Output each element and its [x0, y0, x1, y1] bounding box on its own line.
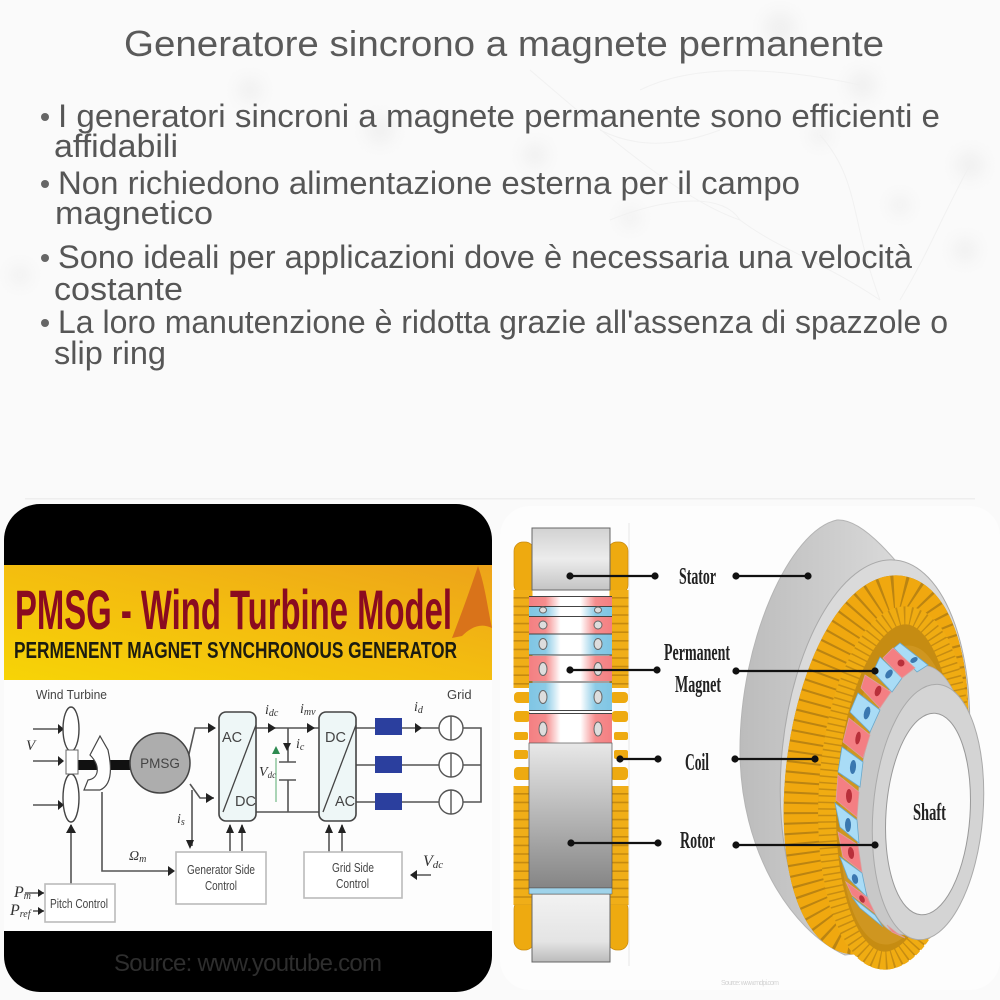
bullet 2: magnetico	[55, 195, 213, 231]
PMSG generator circle	[130, 733, 190, 793]
magnets ring	[835, 643, 928, 927]
component labels: Coil	[685, 750, 709, 776]
generator side control: Control	[205, 878, 237, 893]
diagram labels: Grid	[447, 687, 472, 702]
diagram labels: i	[414, 700, 418, 715]
component labels	[664, 564, 730, 854]
component labels: Stator	[679, 564, 716, 590]
permanent magnets	[529, 596, 612, 743]
3D generator view	[740, 520, 993, 975]
leader lines	[568, 574, 878, 848]
bullet list	[41, 98, 948, 371]
cross-section view	[514, 528, 628, 962]
pitch control	[45, 884, 115, 922]
block diagram	[4, 680, 492, 931]
DC/AC converter	[319, 712, 356, 821]
DC/AC converter: AC	[335, 794, 355, 810]
rotor barrel	[846, 661, 980, 939]
pitch control: Pitch Control	[50, 896, 108, 911]
diagram labels: Wind Turbine	[36, 688, 107, 702]
bullet 1: affidabili	[54, 128, 178, 164]
grid side control: Grid Side	[332, 860, 374, 875]
diagram labels: P	[10, 902, 20, 919]
banner heading: PMSG - Wind Turbine Model	[15, 578, 452, 641]
component labels: Rotor	[680, 828, 715, 854]
magnet holes	[845, 656, 919, 904]
bullet 4: La loro manutenzione è ridotta grazie all'assenza di spazzole o	[58, 304, 948, 340]
diagram labels: d	[418, 705, 424, 716]
diagram labels: m	[24, 891, 31, 902]
diagram labels: V	[259, 765, 268, 780]
image source note: Source: www.mdpi.com	[721, 980, 779, 987]
diagram labels: i	[177, 812, 181, 827]
diagram labels: dc	[433, 859, 443, 871]
diagram labels: s	[181, 817, 185, 828]
bullet 3: costante	[54, 271, 183, 307]
stator back disk	[740, 520, 935, 955]
wind turbine	[63, 707, 133, 822]
source caption: Source: www.youtube.com	[114, 950, 382, 977]
grid side control	[304, 852, 402, 898]
icon: matlab peak logo	[452, 566, 492, 638]
bullet 2: Non richiedono alimentazione esterna per il campo	[58, 165, 800, 201]
bullet 3	[41, 239, 913, 307]
generator side control: Generator Side	[187, 862, 255, 877]
diagram labels: V	[423, 853, 433, 870]
shaft: Shaft	[913, 800, 946, 826]
arrowheads	[38, 723, 422, 915]
diagram labels: Ω	[129, 849, 139, 864]
DC/AC converter: DC	[325, 730, 346, 746]
bullet 4: slip ring	[54, 335, 166, 371]
coil windings	[514, 542, 628, 950]
bullet 1	[41, 98, 940, 164]
stator front ring	[762, 550, 988, 964]
rotor interior	[828, 641, 966, 949]
AC/DC converter: DC	[235, 794, 256, 810]
stator teeth	[783, 585, 969, 945]
grid circles	[439, 716, 463, 814]
bullet 1: I generatori sincroni a magnete permanente sono efficienti e	[58, 98, 940, 134]
filter inductors	[375, 718, 402, 810]
component labels: Magnet	[675, 672, 721, 698]
generator side control	[176, 852, 266, 904]
AC/DC converter: AC	[222, 730, 242, 746]
shaft	[879, 710, 977, 918]
panel: PMSG wind turbine model image	[4, 504, 492, 992]
rotor front face	[863, 680, 993, 944]
banner	[4, 565, 492, 680]
rotor block	[529, 743, 612, 894]
coil ring	[806, 601, 984, 975]
diagram labels: dc	[268, 770, 276, 780]
component labels: Permanent	[664, 640, 730, 666]
diagram labels: i	[265, 703, 269, 718]
diagram labels	[9, 687, 472, 920]
diagram labels: i	[296, 737, 300, 752]
bullet 3: Sono ideali per applicazioni dove è necessaria una velocità	[58, 239, 913, 275]
diagram labels: V	[26, 738, 37, 754]
panel: generator anatomy image	[500, 506, 1000, 990]
diagram labels: i	[300, 702, 304, 717]
diagram labels: c	[300, 742, 305, 753]
PMSG generator circle: PMSG	[140, 756, 180, 771]
diagram labels: mv	[304, 707, 316, 718]
title: Generatore sincrono a magnete permanente	[124, 23, 884, 64]
banner subtitle: PERMENENT MAGNET SYNCHRONOUS GENERATOR	[14, 637, 457, 663]
stator blocks	[532, 528, 610, 962]
bullet 2	[41, 165, 800, 231]
diagram labels: m	[139, 854, 146, 865]
grid side control: Control	[336, 876, 369, 891]
diagram labels: P	[14, 884, 24, 901]
AC/DC converter	[219, 712, 256, 821]
diagram labels: ref	[20, 909, 32, 920]
bullet 4	[41, 304, 948, 371]
diagram labels: dc	[269, 708, 279, 719]
